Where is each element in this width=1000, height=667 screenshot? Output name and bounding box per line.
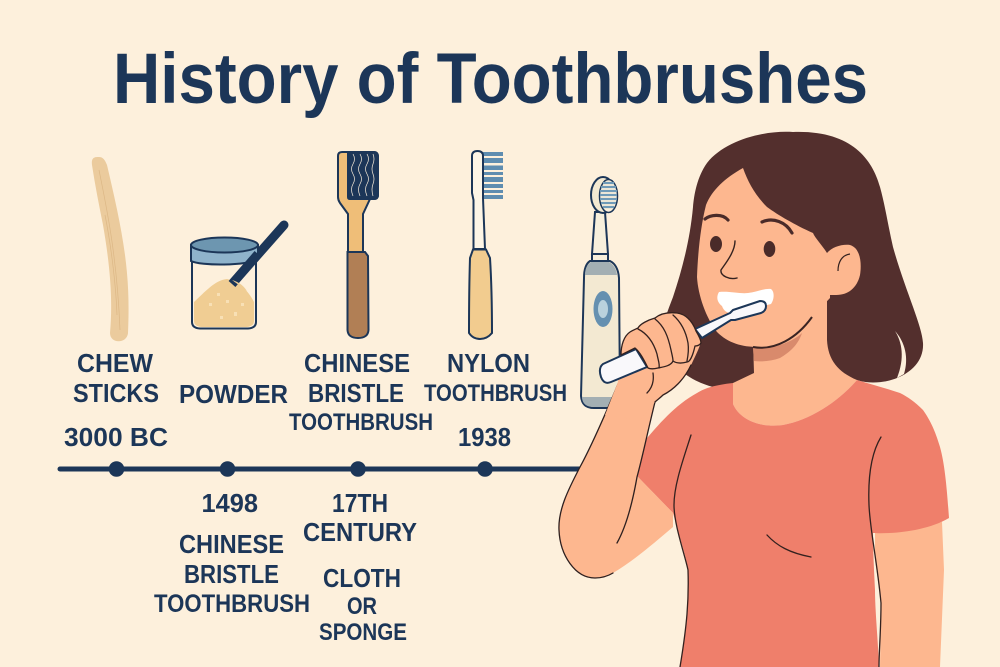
label: nylon toothbrush: TOOTHBRUSH [424,380,567,407]
date: 17th century [303,488,417,547]
date: 3000 BC: 3000 BC [64,422,168,452]
label: chew sticks: STICKS [73,378,159,408]
right eye [764,241,775,257]
label: nylon toothbrush [424,348,567,407]
label: nylon toothbrush: NYLON [447,348,530,378]
palm outline [655,365,691,402]
jaw line [753,317,812,348]
icon: Chinese bristle toothbrush [338,152,378,338]
fingers [621,313,701,393]
label: cloth or sponge [319,563,407,646]
label: Chinese bristle toothbrush upper: BRISTLE [308,378,404,408]
hair [662,132,923,387]
marker: 1498 [220,461,235,477]
label: chew sticks [73,348,159,408]
label: Chinese bristle toothbrush lower: BRISTLE [184,559,279,589]
hand palm [605,342,701,420]
icon: nylon toothbrush [469,151,503,339]
marker: 17th century [350,461,366,477]
shirt fold lines [674,435,881,667]
neck [733,290,857,426]
left eye [710,236,722,252]
date: 1938: 1938 [458,422,511,452]
illustration: woman brushing teeth [559,132,949,667]
label: Chinese bristle toothbrush lower [154,529,310,618]
label: cloth or sponge: OR [347,593,377,620]
date: 17th century: CENTURY [303,517,417,547]
nose [721,241,737,279]
arm outline [559,384,655,578]
marker: 1938 [477,461,493,477]
icon: electric toothbrush [581,177,620,408]
face [697,168,830,347]
left eyebrow [705,215,728,220]
right arm [875,522,944,667]
raised arm [559,350,690,578]
label: Chinese bristle toothbrush upper: TOOTHBRUSH [289,409,433,436]
title: History of Toothbrushes [113,40,868,119]
timeline [60,461,585,477]
date: 1498: 1498 [202,488,258,518]
marker: 3000 BC [109,461,124,477]
label: Chinese bristle toothbrush lower: TOOTHBRUSH [154,590,310,618]
hair highlight [895,331,906,378]
right eyebrow [762,220,792,233]
shirt [637,380,949,667]
toothpaste foam [717,289,774,313]
chin shadow [753,333,802,361]
date: 17th century: 17TH [332,488,388,518]
label: cloth or sponge: CLOTH [323,563,401,593]
label: Chinese bristle toothbrush upper: CHINESE [304,348,410,378]
ear [827,245,861,295]
toothbrush in hand [600,301,766,383]
icon: powder jar with spoon [191,225,284,328]
label: chew sticks: CHEW [77,348,153,378]
icon: chew stick [92,157,129,341]
label: powder: POWDER [179,379,288,409]
label: Chinese bristle toothbrush upper [289,348,433,436]
label: cloth or sponge: SPONGE [319,619,407,646]
label: Chinese bristle toothbrush lower: CHINESE [179,529,284,559]
